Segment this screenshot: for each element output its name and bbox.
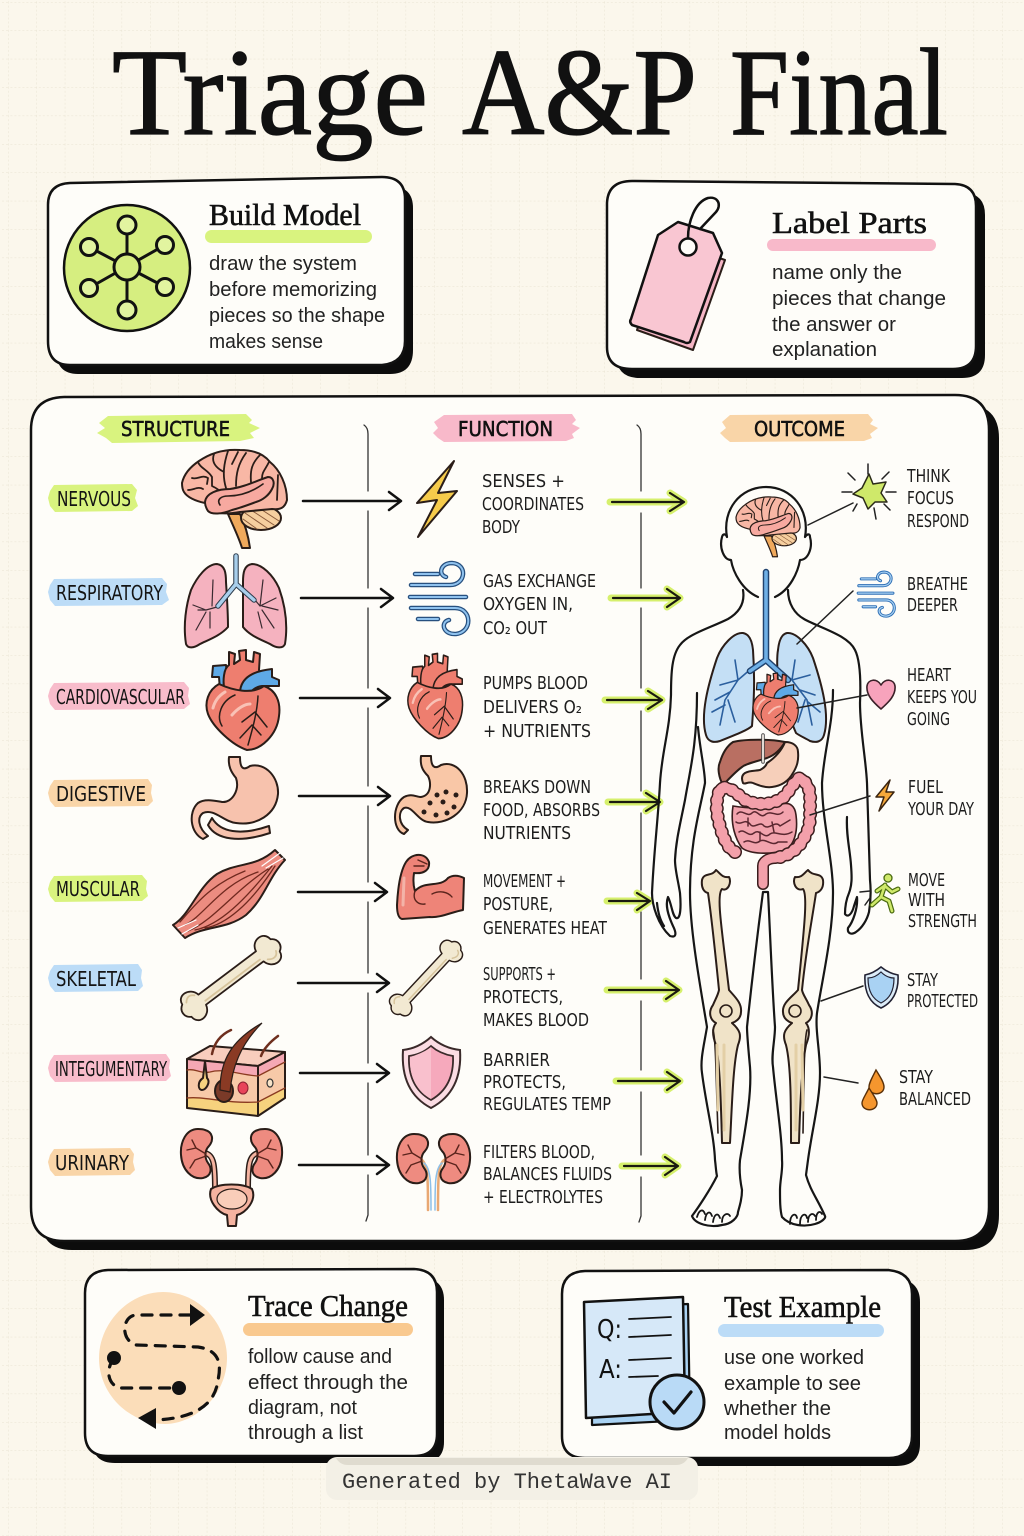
icon: shield	[403, 1037, 460, 1108]
text: build model description: before memorizing	[209, 279, 377, 301]
title: A&P	[462, 24, 697, 161]
outcome: protected: PROTECTED	[907, 991, 978, 1012]
text: skeletal function	[483, 964, 589, 1031]
text: urinary function: BALANCES FLUIDS	[483, 1164, 612, 1185]
text: respiratory function: GAS EXCHANGE	[483, 571, 596, 592]
outcome: heart: HEART	[907, 665, 952, 686]
text: label parts description: name only the	[772, 262, 902, 284]
organ: brain	[736, 497, 800, 557]
row: cardiovascular	[48, 650, 591, 750]
text: integumentary function: BARRIER	[483, 1050, 550, 1071]
heading: structure	[97, 414, 260, 443]
text: trace change description: diagram, not	[248, 1397, 357, 1419]
footer badge: Generated by ThetaWave AI	[342, 1470, 672, 1495]
title: Final	[730, 24, 948, 161]
text: trace change description	[248, 1346, 408, 1444]
text: digestive function	[483, 777, 600, 844]
label: muscular: MUSCULAR	[56, 877, 140, 901]
text: urinary function: FILTERS BLOOD,	[483, 1142, 595, 1163]
text: label parts description: explanation	[772, 339, 877, 361]
label: digestive: DIGESTIVE	[56, 782, 146, 806]
heading: outcome	[720, 414, 878, 442]
panel: trace change	[85, 1269, 444, 1463]
text: integumentary function: REGULATES TEMP	[483, 1094, 611, 1115]
text: digestive function: BREAKS DOWN	[483, 777, 591, 798]
text: test example description: use one worked	[724, 1347, 864, 1369]
label: urinary: URINARY	[55, 1151, 130, 1175]
organ: intestines	[717, 778, 810, 884]
text: integumentary function	[483, 1050, 611, 1115]
organ: stomach	[742, 742, 798, 787]
icon: network	[64, 205, 190, 331]
icon: kidneys and bladder	[181, 1129, 282, 1226]
row: respiratory	[48, 556, 596, 647]
outcome: heart	[867, 665, 977, 730]
arrow: structure to function	[298, 883, 387, 901]
label: muscular	[48, 875, 148, 902]
label: respiratory: RESPIRATORY	[56, 581, 164, 605]
icon: brain	[182, 450, 287, 548]
text: digestive function: FOOD, ABSORBS	[483, 800, 600, 821]
icon: lungs	[185, 556, 286, 647]
heading: build model: Build Model	[209, 197, 361, 232]
outcome: fuel	[876, 777, 975, 820]
text: trace change description: through a list	[248, 1422, 363, 1444]
bones: right leg	[783, 870, 823, 1143]
icon: skin	[187, 1023, 285, 1116]
icon: star	[842, 464, 896, 519]
outcome: balanced	[862, 1067, 971, 1110]
falciform line	[761, 735, 765, 762]
label: cardiovascular	[48, 682, 190, 710]
text: muscular function	[483, 871, 608, 939]
label: nervous: NERVOUS	[57, 487, 131, 511]
title: Triage	[112, 24, 428, 161]
feet toes	[697, 1210, 822, 1224]
text: nervous function: COORDINATES	[482, 494, 584, 515]
outcome: protected	[865, 967, 978, 1012]
label: nervous	[48, 484, 138, 512]
heading: test example	[718, 1289, 884, 1337]
text: digestive function: NUTRIENTS	[483, 823, 571, 844]
icon: muscle	[173, 850, 285, 938]
text: build model description: pieces so the shape	[209, 305, 385, 327]
text: label parts description	[772, 262, 946, 361]
text: integumentary function: PROTECTS,	[483, 1072, 566, 1093]
organ: lungs	[704, 572, 826, 742]
organ: heart	[753, 673, 798, 735]
icon: water drops	[862, 1070, 884, 1110]
outcome: breathe	[858, 572, 968, 616]
outcome: breathe: BREATHE	[907, 574, 968, 595]
panel: label parts	[607, 181, 985, 378]
row: muscular	[48, 850, 608, 939]
icon: stomach	[192, 757, 278, 839]
outcome: breathe: DEEPER	[907, 595, 958, 616]
icon: stomach with dots	[395, 756, 467, 834]
arrow: structure to function	[299, 1156, 389, 1174]
text: test example description: model holds	[724, 1422, 831, 1444]
outcome: balanced: STAY	[899, 1067, 934, 1088]
row: integumentary	[48, 1023, 611, 1116]
icon: orange bolt	[876, 780, 894, 811]
arrow: structure to function	[298, 974, 389, 992]
text: respiratory function: CO₂ OUT	[483, 618, 548, 639]
panel: build model	[48, 177, 413, 374]
label: integumentary	[48, 1054, 171, 1082]
outcome: heart: KEEPS YOU	[907, 687, 977, 708]
arrow: structure to function	[303, 492, 401, 510]
text: test example description: example to see	[724, 1373, 861, 1395]
text: build model description: draw the system	[209, 253, 357, 275]
heading: outcome: OUTCOME	[754, 417, 845, 441]
heading: trace change: Trace Change	[248, 1288, 408, 1323]
icon: dashed path	[99, 1292, 227, 1429]
text: cardiovascular function	[483, 673, 591, 742]
icon: pink heart	[867, 680, 895, 709]
icon: tag	[630, 198, 725, 350]
text: test example description: whether the	[723, 1398, 831, 1420]
icon: bone	[174, 930, 288, 1026]
text: skeletal function: PROTECTS,	[483, 987, 563, 1008]
icon: lightning	[417, 461, 457, 537]
title	[112, 24, 948, 161]
arrow: structure to function	[301, 589, 393, 607]
outcome: heart: GOING	[907, 709, 950, 730]
text: cardiovascular function: + NUTRIENTS	[483, 721, 591, 742]
text: muscular function: GENERATES HEAT	[483, 918, 608, 939]
icon: blue shield	[865, 967, 898, 1008]
text: label parts description: pieces that change	[772, 288, 946, 310]
text: skeletal function: MAKES BLOOD	[483, 1010, 589, 1031]
icon: kidneys with ducts	[397, 1134, 470, 1210]
arrow: structure to function	[300, 689, 390, 707]
text: nervous function	[482, 471, 584, 538]
text: muscular function: POSTURE,	[483, 894, 553, 915]
text: cardiovascular function: DELIVERS O₂	[483, 697, 582, 718]
heading: structure: STRUCTURE	[121, 417, 230, 441]
icon: runner	[872, 874, 898, 911]
arrows: function to outcome	[605, 493, 684, 1175]
label: respiratory	[48, 578, 169, 606]
panel: test example	[562, 1270, 920, 1466]
outcome: fuel: YOUR DAY	[907, 799, 975, 820]
footer badge	[326, 1457, 698, 1500]
outcome: move	[872, 870, 977, 932]
row: skeletal	[48, 930, 589, 1031]
outcome: move: STRENGTH	[908, 911, 977, 932]
outcome: think	[842, 464, 969, 532]
leader lines	[797, 503, 870, 1083]
label: integumentary: INTEGUMENTARY	[55, 1057, 168, 1081]
organ: liver	[719, 740, 785, 785]
icon: test sheet: A:	[599, 1355, 622, 1385]
text: label parts description: the answer or	[772, 314, 896, 336]
heading: label parts	[767, 205, 936, 251]
text: respiratory function	[483, 571, 596, 639]
body diagram	[652, 487, 871, 1226]
label: cardiovascular: CARDIOVASCULAR	[56, 685, 185, 709]
heading: function	[433, 414, 580, 442]
row: urinary	[48, 1129, 612, 1226]
icon: heart	[206, 650, 279, 750]
outcome: think: THINK	[906, 466, 951, 487]
body outline	[652, 487, 871, 1226]
panel: main body systems	[31, 395, 999, 1250]
icon: test sheet: Q:	[597, 1315, 622, 1345]
text: test example description	[723, 1347, 864, 1444]
text: build model description	[209, 253, 385, 353]
heading: label parts: Label Parts	[772, 205, 927, 240]
bones: left leg	[702, 870, 741, 1143]
text: urinary function	[483, 1142, 612, 1208]
row: digestive	[48, 756, 600, 844]
outcome: think: RESPOND	[907, 511, 969, 532]
icon: flexed arm	[397, 855, 464, 919]
outcome: move: WITH	[908, 890, 945, 911]
outcome: balanced: BALANCED	[899, 1089, 971, 1110]
text: build model description: makes sense	[209, 331, 323, 353]
icon: heart small	[408, 654, 463, 738]
text: nervous function: BODY	[482, 517, 521, 538]
text: nervous function: SENSES +	[482, 471, 565, 492]
label: skeletal: SKELETAL	[56, 967, 137, 991]
icon: test sheet	[584, 1297, 704, 1429]
text: muscular function: MOVEMENT +	[483, 871, 566, 892]
text: respiratory function: OXYGEN IN,	[483, 594, 573, 615]
heading: function: FUNCTION	[458, 417, 553, 441]
icon: wind small	[858, 572, 894, 616]
text: skeletal function: SUPPORTS +	[483, 964, 556, 985]
icon: wind	[410, 563, 468, 634]
row: nervous	[48, 450, 584, 548]
outcome: think: FOCUS	[907, 488, 954, 509]
outcome: fuel: FUEL	[908, 777, 943, 798]
arrow: structure to function	[299, 787, 390, 805]
outcome: move: MOVE	[908, 870, 945, 891]
text: trace change description: follow cause and	[248, 1346, 392, 1368]
text: cardiovascular function: PUMPS BLOOD	[483, 673, 588, 694]
heading: trace change	[243, 1288, 413, 1336]
text: urinary function: + ELECTROLYTES	[483, 1187, 603, 1208]
icon: bone small	[384, 935, 468, 1021]
heading: test example: Test Example	[724, 1289, 881, 1324]
arrow: structure to function	[300, 1064, 389, 1082]
outcome: protected: STAY	[907, 970, 939, 991]
text: trace change description: effect through the	[248, 1372, 408, 1394]
